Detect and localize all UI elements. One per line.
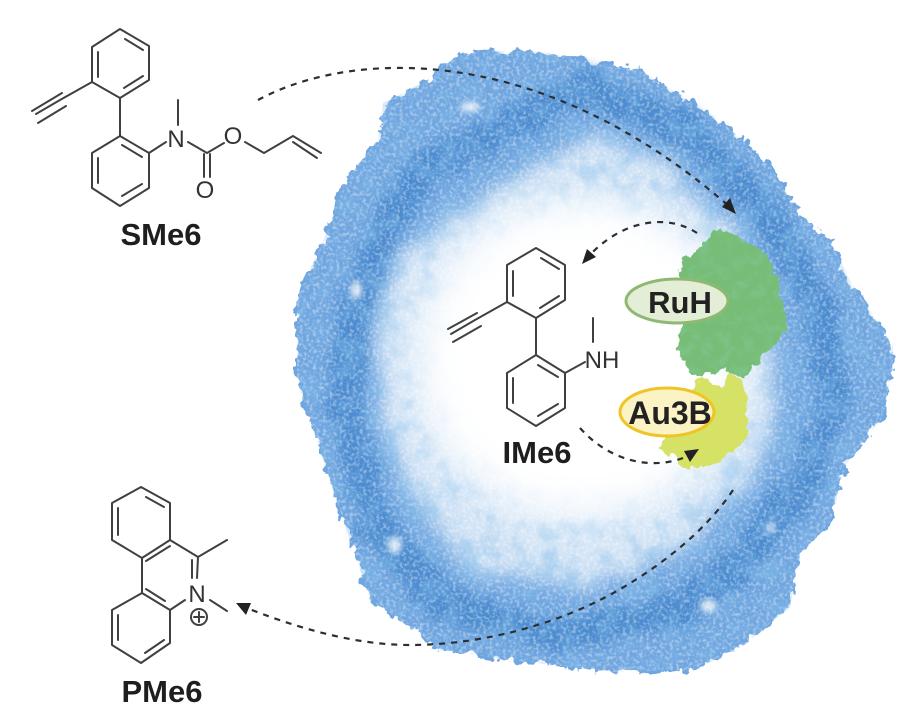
molecule: PMe6 [112, 487, 227, 708]
molecule: SMe6: O [196, 177, 214, 204]
molecule: PMe6: N [188, 581, 206, 608]
label: Au3B [620, 388, 714, 436]
molecule: IMe6 [448, 248, 619, 470]
molecule: PMe6: PMe6 [122, 674, 202, 708]
molecule: IMe6: IMe6 [503, 435, 571, 470]
arrow: IMe6 to Au3B [580, 428, 699, 463]
arrow: SMe6 into cage [258, 68, 736, 214]
arrow: RuH to IMe6 [582, 222, 697, 264]
molecule: SMe6: O [224, 123, 242, 150]
molecule: SMe6 [32, 29, 321, 252]
label: RuH [626, 279, 728, 323]
label: RuH: RuH [648, 285, 712, 320]
label: Au3B: Au3B [628, 395, 712, 431]
protein: RuH green [676, 228, 788, 378]
arrow: cage to PMe6 [236, 490, 733, 645]
molecule: SMe6: SMe6 [121, 217, 201, 252]
white pores in the shell [350, 102, 775, 613]
molecule: SMe6: N [167, 126, 185, 153]
molecule: IMe6: NH [585, 347, 619, 374]
protein cage [290, 45, 900, 685]
protein: Au3B yellow [658, 372, 748, 470]
